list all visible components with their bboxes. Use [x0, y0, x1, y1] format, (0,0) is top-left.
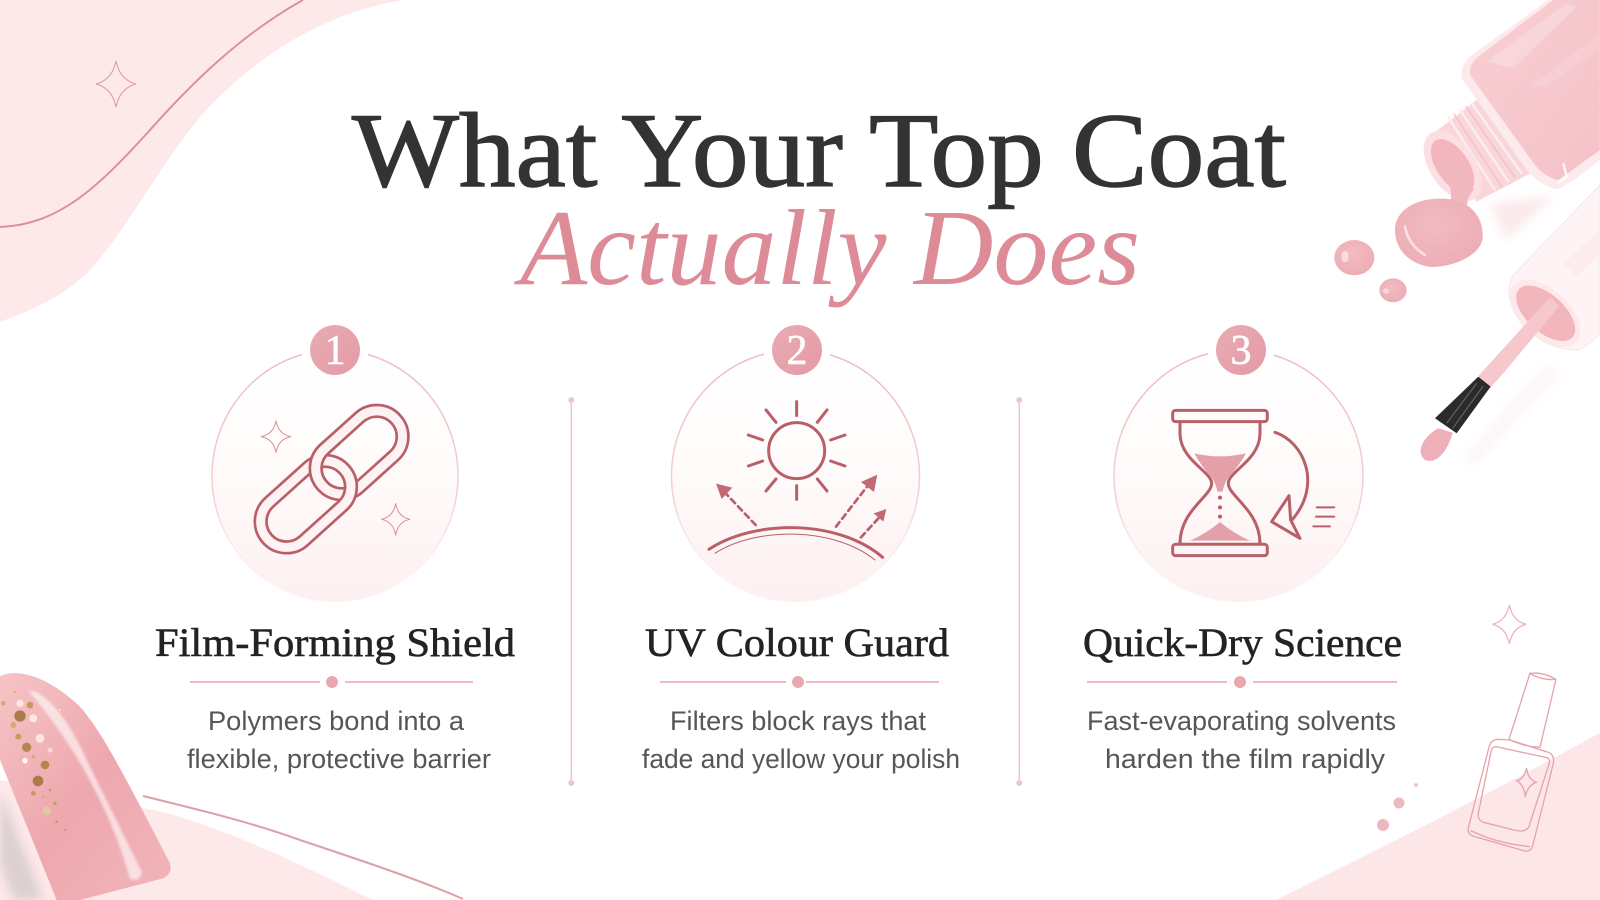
badge gap 3: [1208, 335, 1274, 365]
badge gap 2: [764, 335, 830, 365]
sparkle: bottom right: [1493, 605, 1526, 644]
background blob: top left: [0, 0, 403, 322]
heading rule 1: [190, 676, 473, 688]
bottle neck with threads: [1433, 95, 1543, 202]
vertical divider 1: [568, 397, 574, 786]
body text 1: Polymers bond into a: [208, 706, 464, 736]
bottle mouth: [1412, 121, 1493, 211]
body text 3: Fast-evaporating solvents: [1087, 706, 1396, 736]
heading 2: UV Colour Guard: [645, 620, 949, 665]
gold glitter: [1, 691, 66, 831]
title line 1: What Your Top Coat: [352, 92, 1286, 209]
title: [352, 92, 1286, 308]
brush drop: [1421, 428, 1453, 461]
illustration: spilled nail polish bottle and brush: [1334, 0, 1600, 467]
sparkle: top left: [96, 61, 136, 107]
number badge 3: 3: [1230, 328, 1252, 374]
nail highlight: [28, 691, 142, 880]
badge gap 1: [302, 335, 368, 365]
bottle body: [1461, 0, 1600, 189]
number badge 2: [772, 325, 822, 375]
polish drop small: [1379, 278, 1407, 302]
body text 3: [1087, 706, 1396, 774]
body text 2: Filters block rays that: [670, 706, 927, 736]
bottle cap: [1497, 185, 1600, 360]
heading 3: Quick-Dry Science: [1083, 620, 1402, 665]
background blob: bottom left: [0, 780, 373, 900]
decorative curve: bottom left: [143, 796, 463, 899]
icon: hourglass with arrow: [1173, 410, 1334, 556]
decorative curve: top left: [0, 0, 303, 227]
line bottle body: [1468, 739, 1554, 851]
panel: quick-dry science: [1083, 325, 1402, 774]
brush stem: [1478, 297, 1559, 387]
vertical divider 2: [1016, 397, 1022, 786]
nail surface: [0, 673, 171, 900]
line bottle sparkle: [1517, 768, 1537, 797]
number badge 1: 1: [324, 328, 346, 374]
nail shadow: [0, 790, 43, 900]
icon disc 1: [212, 350, 458, 602]
number badge 2: 2: [786, 328, 808, 374]
icon disc 2: [672, 350, 920, 602]
body text 1: flexible, protective barrier: [187, 744, 491, 774]
polish puddle: [1395, 199, 1483, 267]
panel: uv colour guard: [642, 325, 960, 774]
illustration: line-art nail polish bottle: [1468, 673, 1556, 851]
polish drop large: [1334, 240, 1374, 275]
background blob: bottom right: [1276, 733, 1600, 900]
illustration: manicured nail with glitter: [0, 673, 171, 900]
line bottle cap: [1471, 673, 1556, 847]
decorative dots: bottom right: [1377, 783, 1418, 831]
heading 1: Film-Forming Shield: [155, 620, 515, 665]
brush bristles: [1435, 377, 1491, 433]
icon: chain links: [254, 404, 410, 554]
heading rule 2: [660, 676, 939, 688]
number badge 3: [1216, 325, 1266, 375]
polish drip: [1442, 150, 1474, 213]
number badge 1: [310, 325, 360, 375]
body text 2: fade and yellow your polish: [642, 744, 960, 774]
body text 3: harden the film rapidly: [1105, 744, 1386, 774]
heading rule 3: [1087, 676, 1397, 688]
icon: sun and reflected rays: [709, 402, 886, 560]
shadow: bottle and cap: [1460, 197, 1563, 467]
body text 1: [187, 706, 491, 774]
body text 2: [642, 706, 960, 774]
title line 2: Actually Does: [514, 189, 1140, 308]
panel: film-forming shield: [155, 325, 515, 774]
icon disc 3: [1114, 350, 1363, 602]
